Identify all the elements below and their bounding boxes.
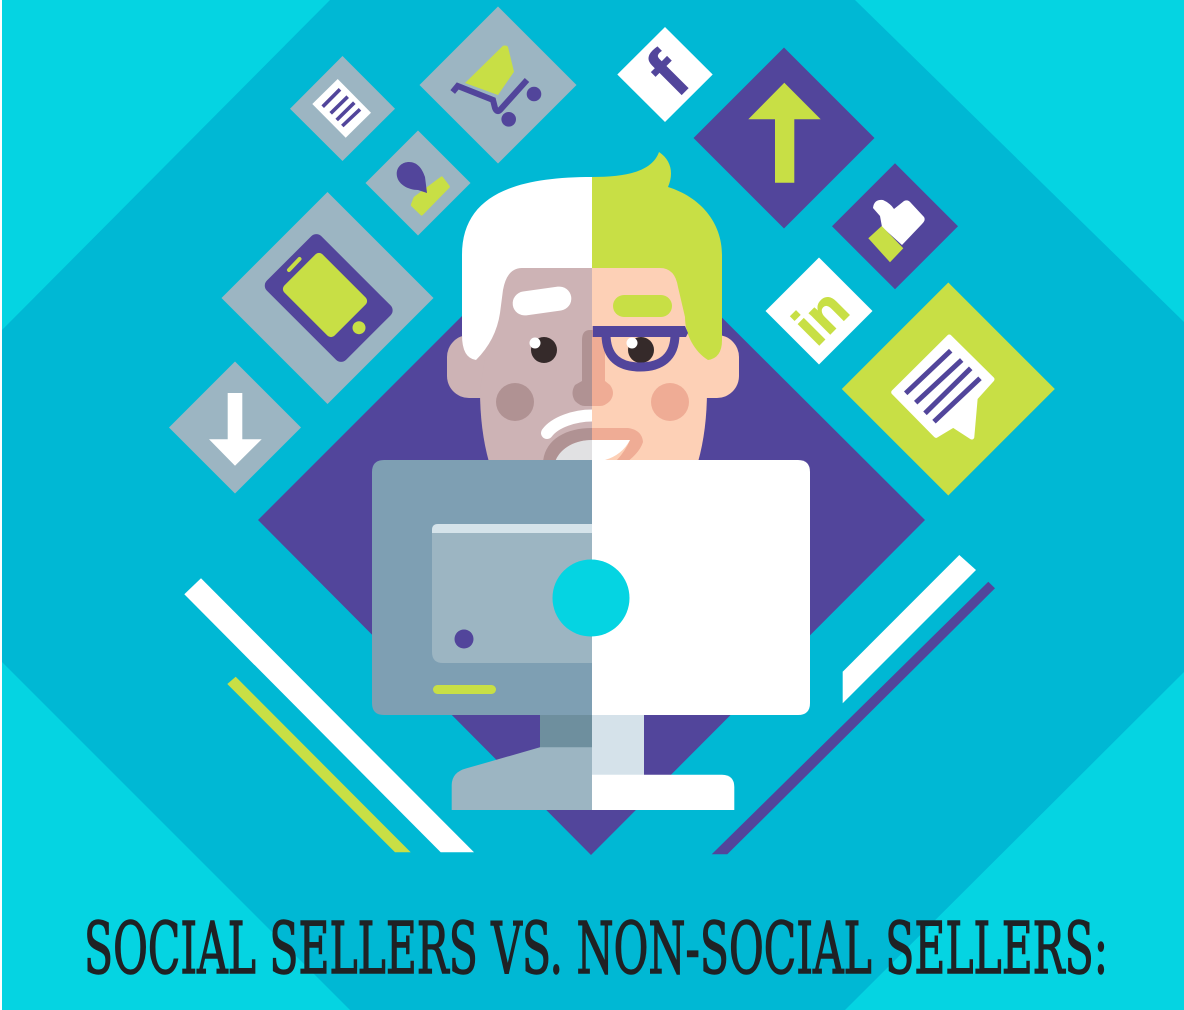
eye: left [530,337,557,363]
icon: person [366,130,470,236]
monitor bezel [372,460,810,715]
power button [552,560,630,636]
icon: linkedin [766,258,872,364]
glasses [593,326,688,367]
purple central diamond [258,187,925,855]
icon: facebook [617,27,713,122]
hair: green [592,152,722,360]
indicator bar [433,685,496,694]
icon: upload arrow [694,48,874,228]
icon: shopping cart [420,6,576,164]
hair: white [462,177,592,360]
mouth [543,416,643,462]
monitor stand [452,715,734,810]
left stripes [184,578,474,852]
eye: right [626,337,654,363]
icon: facebook: f [632,37,706,111]
icon: tablet [222,192,434,404]
monitor [372,460,810,810]
icon: thumbs up [832,163,958,289]
icon: speech bubble [842,282,1055,496]
face: non-social side [447,260,592,462]
nose [572,330,613,406]
eyebrow: right [613,295,672,317]
face: social side [592,260,739,462]
icon: download arrow [169,362,301,494]
character: split face [447,152,739,462]
icon: document [290,56,395,161]
eyebrow: left [511,285,573,317]
monitor screen [432,524,592,663]
right stripes [712,555,995,854]
icon: linkedin: in [780,276,860,356]
